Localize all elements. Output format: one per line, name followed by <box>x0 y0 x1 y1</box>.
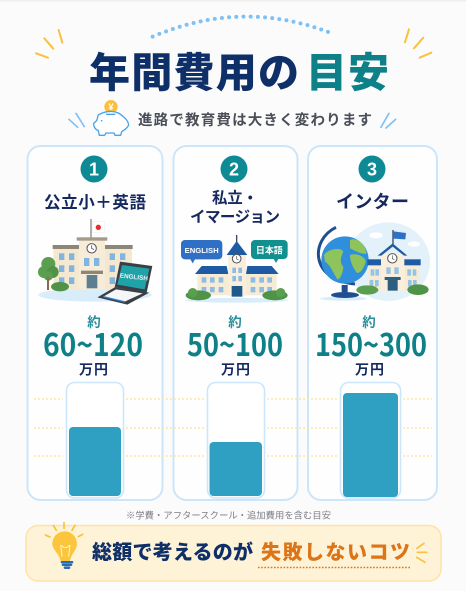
illustration: speech bubbles and school <box>181 235 288 303</box>
tip text <box>92 536 410 565</box>
icon: light bulb <box>45 523 83 569</box>
number badge 3 <box>358 156 386 182</box>
panel: card 1 公立小＋英語 <box>28 146 162 500</box>
heading: card 2: 私立・ <box>212 186 258 208</box>
icon: accent rays <box>417 543 427 562</box>
title: 年間費用の <box>89 39 299 99</box>
panel: card 2 私立・イマージョン <box>174 146 298 500</box>
icon: piggy bank with yen coin <box>94 100 129 135</box>
bar: card 3 <box>340 382 400 498</box>
heading: card 2: イマージョン <box>190 205 280 227</box>
dotted underline <box>258 566 410 568</box>
tip text: 総額で考えるのが <box>92 536 253 565</box>
footnote: ※学費・アフタースクール・追加費用を含む目安 <box>126 508 331 522</box>
bar: card 1 <box>66 382 124 498</box>
bar: card 2 <box>208 382 264 498</box>
panel: card 3 インター <box>308 146 437 500</box>
illustration: school and laptop <box>38 219 152 305</box>
label: 約: 約 <box>228 311 242 331</box>
unit: 万円: 万円 <box>79 360 109 380</box>
illustration: globe and school <box>318 222 430 301</box>
number badge 3: 3 <box>367 160 377 180</box>
figure: 50~100: 50~100 <box>187 320 283 365</box>
label: 約: 約 <box>87 311 101 331</box>
unit: 万円: 万円 <box>355 360 385 380</box>
number badge 2 <box>220 156 248 182</box>
bar chart: annual cost per course <box>66 382 400 498</box>
icon: yellow sparkle rays left and right of title <box>36 29 431 58</box>
label: 約: 約 <box>362 311 376 331</box>
illustration: school and laptop: ENGLISH <box>119 273 149 282</box>
number badge 1: 1 <box>89 160 99 180</box>
icon: piggy bank with yen coin: ¥ <box>108 102 114 112</box>
decorative dotted arc above title <box>153 17 330 37</box>
number badge 1 <box>80 156 108 182</box>
callout: bottom tip banner <box>26 523 441 581</box>
heading: card 1: 公立小＋英語 <box>44 189 146 213</box>
illustration: speech bubbles and school: 日本語 <box>256 243 283 256</box>
tip text: 失敗しないコツ <box>261 536 410 565</box>
unit: 万円: 万円 <box>221 360 251 380</box>
icon: blue accent rays around subtitle <box>69 113 396 128</box>
heading: card 2 <box>190 186 280 227</box>
subtitle: 進路で教育費は大きく変わります <box>138 109 372 130</box>
figure: 150~300: 150~300 <box>315 320 427 365</box>
heading: card 3: インター <box>336 188 409 214</box>
illustration: speech bubbles and school: ENGLISH <box>185 246 219 255</box>
title: 目安 <box>306 39 389 99</box>
chart guide lines (dotted) <box>34 399 432 456</box>
number badge 2: 2 <box>229 160 239 180</box>
figure: 60~120: 60~120 <box>43 320 143 365</box>
